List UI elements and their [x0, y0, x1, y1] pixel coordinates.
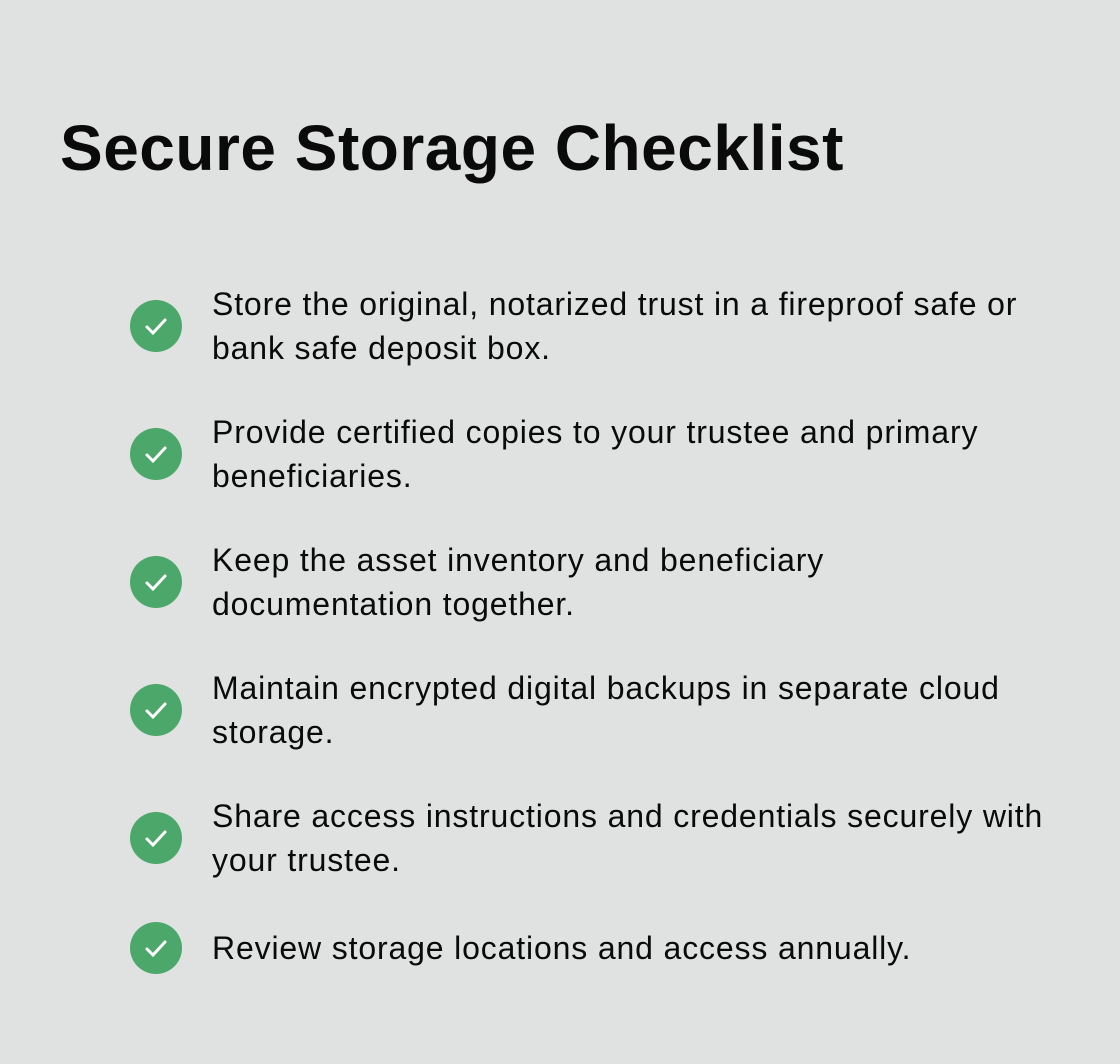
text: Review storage locations and access annually.: [212, 930, 911, 966]
text: [212, 798, 1043, 878]
item 2: [130, 414, 978, 494]
title: Secure Storage Checklist: [60, 112, 844, 184]
text: storage.: [212, 714, 334, 750]
text: Provide certified copies to your trustee and primary: [212, 414, 978, 450]
icon: check: [130, 428, 182, 480]
text: Maintain encrypted digital backups in separate cloud: [212, 670, 1000, 706]
icon: check: [130, 300, 182, 352]
icon: check: [130, 556, 182, 608]
text: Store the original, notarized trust in a fireproof safe or: [212, 286, 1017, 322]
text: Share access instructions and credentials securely with: [212, 798, 1043, 834]
text: [212, 670, 1000, 750]
icon: check: [130, 812, 182, 864]
text: documentation together.: [212, 586, 575, 622]
item 3: [130, 542, 824, 622]
icon: check: [130, 922, 182, 974]
text: beneficiaries.: [212, 458, 412, 494]
item 6: [130, 922, 911, 974]
item 4: [130, 670, 1000, 750]
item 1: [130, 286, 1017, 366]
text: Keep the asset inventory and beneficiary: [212, 542, 824, 578]
text: your trustee.: [212, 842, 401, 878]
icon: check: [130, 684, 182, 736]
text: [212, 414, 978, 494]
text: [212, 286, 1017, 366]
text: bank safe deposit box.: [212, 330, 551, 366]
text: [212, 542, 824, 622]
item 5: [130, 798, 1043, 878]
